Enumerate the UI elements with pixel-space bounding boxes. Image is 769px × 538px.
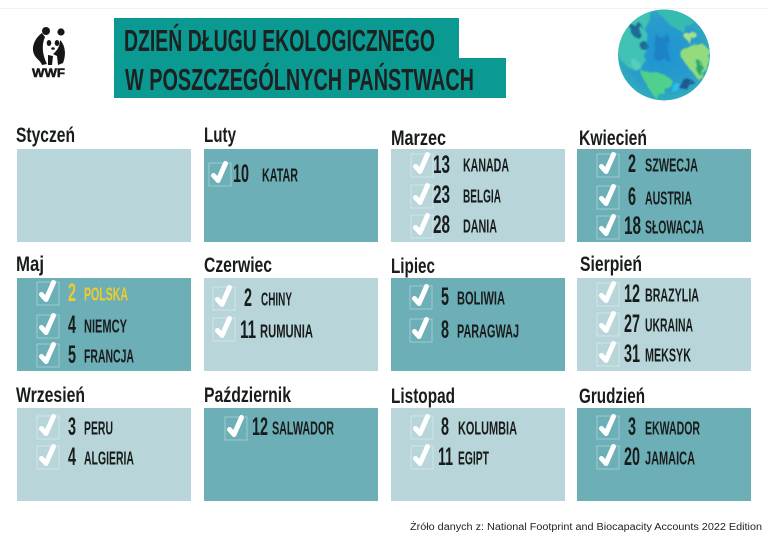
entry: 3 Peru: 3 bbox=[68, 413, 76, 441]
entry: 8 Paragwaj bbox=[410, 316, 519, 344]
entry: 12 Salwador: 12 bbox=[252, 413, 268, 441]
entry: 12 Salwador bbox=[225, 413, 334, 441]
entry: 5 Francja: 5 bbox=[68, 341, 76, 369]
entry: 10 Katar: KATAR bbox=[262, 165, 298, 185]
panel: Grudzień bbox=[577, 385, 751, 501]
entry: 20 Jamaica bbox=[597, 443, 695, 471]
entry: 31 Meksyk: 31 bbox=[624, 340, 640, 368]
title banner bbox=[114, 18, 506, 98]
entry: 12 Brazylia bbox=[597, 280, 699, 308]
entry: 8 Kolumbia bbox=[411, 413, 517, 441]
entry: 6 Austria: AUSTRIA bbox=[645, 188, 692, 208]
panel: Wrzesień bbox=[16, 384, 191, 501]
entry: 2 Polska (highlight): POLSKA bbox=[84, 284, 128, 304]
entry: 3 Peru: PERU bbox=[84, 418, 113, 438]
panel: Październik bbox=[204, 384, 378, 501]
heading: Luty: Luty bbox=[204, 124, 236, 147]
entry: 4 Algieria: ALGIERIA bbox=[84, 448, 134, 468]
heading: Listopad: Listopad bbox=[391, 385, 455, 408]
heading: Sierpień: Sierpień bbox=[580, 253, 642, 276]
entry: 2 Szwecja bbox=[597, 150, 698, 178]
entry: 13 Kanada bbox=[411, 151, 509, 179]
entry: 2 Szwecja: 2 bbox=[628, 150, 636, 178]
icon: watercolour globe bbox=[616, 6, 710, 100]
heading: Grudzień: Grudzień bbox=[579, 385, 645, 408]
entry: 2 Chiny: CHINY bbox=[261, 289, 292, 309]
entry: 4 Niemcy: NIEMCY bbox=[84, 316, 127, 336]
entry: 5 Boliwia: BOLIWIA bbox=[457, 288, 505, 308]
panel: Sierpień bbox=[577, 253, 751, 371]
entry: 31 Meksyk: MEKSYK bbox=[645, 345, 691, 365]
source note: Żróło danych z: National Footprint and Biocapacity Accounts 2022 Edition bbox=[410, 520, 762, 533]
entry: 23 Belgia: 23 bbox=[433, 181, 450, 209]
entry: 11 Rumunia: 11 bbox=[240, 316, 256, 344]
heading: Lipiec: Lipiec bbox=[391, 255, 435, 278]
panel: Marzec bbox=[391, 127, 565, 242]
heading: Styczeń: Styczeń bbox=[16, 124, 75, 147]
entry: 4 Niemcy: 4 bbox=[68, 311, 76, 339]
heading: Marzec: Marzec bbox=[391, 127, 446, 150]
title line 2: W POSZCZEGÓLNYCH PAŃSTWACH bbox=[125, 61, 474, 97]
entry: 11 Rumunia bbox=[213, 316, 313, 344]
entry: 20 Jamaica: 20 bbox=[624, 443, 640, 471]
panel: Listopad bbox=[391, 385, 565, 501]
heading: Wrzesień: Wrzesień bbox=[16, 384, 85, 407]
entry: 3 Peru bbox=[37, 413, 113, 441]
entry: 10 Katar bbox=[209, 160, 298, 188]
entry: 3 Ekwador: 3 bbox=[628, 413, 636, 441]
entry: 5 Boliwia: 5 bbox=[441, 283, 449, 311]
entry: 2 Chiny: 2 bbox=[244, 284, 252, 312]
entry: 27 Ukraina: UKRAINA bbox=[645, 315, 693, 335]
entry: 28 Dania: 28 bbox=[433, 211, 450, 239]
heading: Październik: Październik bbox=[204, 384, 291, 407]
entry: 18 Słowacja: SŁOWACJA bbox=[645, 217, 704, 237]
entry: 27 Ukraina bbox=[597, 310, 693, 338]
entry: 3 Ekwador bbox=[597, 413, 700, 441]
entry: 20 Jamaica: JAMAICA bbox=[645, 448, 695, 468]
entry: 11 Egipt: 11 bbox=[438, 443, 453, 471]
panel: Kwiecień bbox=[577, 127, 751, 242]
entry: 3 Ekwador: EKWADOR bbox=[645, 418, 700, 438]
entry: 28 Dania bbox=[411, 211, 497, 239]
entry: 8 Paragwaj: 8 bbox=[441, 316, 449, 344]
entry: 2 Polska (highlight): 2 bbox=[68, 279, 76, 307]
entry: 13 Kanada: KANADA bbox=[463, 155, 509, 175]
entry: 12 Brazylia: 12 bbox=[624, 280, 640, 308]
logo: WWF panda bbox=[32, 27, 65, 80]
panel: Maj bbox=[16, 253, 191, 371]
entry: 28 Dania: DANIA bbox=[463, 216, 497, 236]
title line 1: DZIEŃ DŁUGU EKOLOGICZNEGO bbox=[124, 23, 435, 58]
panel: Luty bbox=[204, 124, 378, 242]
entry: 2 Chiny bbox=[213, 284, 292, 312]
entry: 31 Meksyk bbox=[597, 340, 691, 368]
entry: 2 Polska (highlight) bbox=[37, 279, 128, 307]
entry: 11 Egipt bbox=[411, 443, 489, 471]
entry: 8 Paragwaj: PARAGWAJ bbox=[457, 321, 519, 341]
entry: 11 Rumunia: RUMUNIA bbox=[260, 321, 313, 341]
panel: Lipiec bbox=[391, 255, 565, 371]
panel: Czerwiec bbox=[204, 254, 378, 371]
entry: 5 Francja bbox=[37, 341, 134, 369]
entry: 5 Boliwia bbox=[410, 283, 505, 311]
heading: Maj: Maj bbox=[16, 253, 44, 276]
entry: 4 Niemcy bbox=[37, 311, 127, 339]
entry: 13 Kanada: 13 bbox=[433, 151, 450, 179]
entry: 18 Słowacja bbox=[597, 212, 704, 240]
entry: 4 Algieria: 4 bbox=[68, 443, 76, 471]
entry: 12 Brazylia: BRAZYLIA bbox=[645, 285, 699, 305]
entry: 12 Salwador: SALWADOR bbox=[272, 418, 334, 438]
entry: 2 Szwecja: SZWECJA bbox=[645, 155, 698, 175]
entry: 23 Belgia bbox=[411, 181, 501, 209]
heading: Czerwiec: Czerwiec bbox=[204, 254, 272, 277]
entry: 18 Słowacja: 18 bbox=[624, 212, 641, 240]
entry: 4 Algieria bbox=[37, 443, 134, 471]
entry: 27 Ukraina: 27 bbox=[624, 310, 640, 338]
panel: Styczeń bbox=[16, 124, 191, 242]
entry: 8 Kolumbia: 8 bbox=[441, 413, 449, 441]
entry: 6 Austria bbox=[597, 183, 692, 211]
entry: 23 Belgia: BELGIA bbox=[463, 186, 501, 206]
heading: Kwiecień: Kwiecień bbox=[579, 127, 647, 150]
entry: 6 Austria: 6 bbox=[628, 183, 636, 211]
entry: 8 Kolumbia: KOLUMBIA bbox=[458, 418, 517, 438]
entry: 10 Katar: 10 bbox=[233, 160, 249, 188]
entry: 5 Francja: FRANCJA bbox=[84, 346, 134, 366]
entry: 11 Egipt: EGIPT bbox=[458, 448, 489, 468]
logo wordmark: WWF bbox=[32, 66, 65, 80]
